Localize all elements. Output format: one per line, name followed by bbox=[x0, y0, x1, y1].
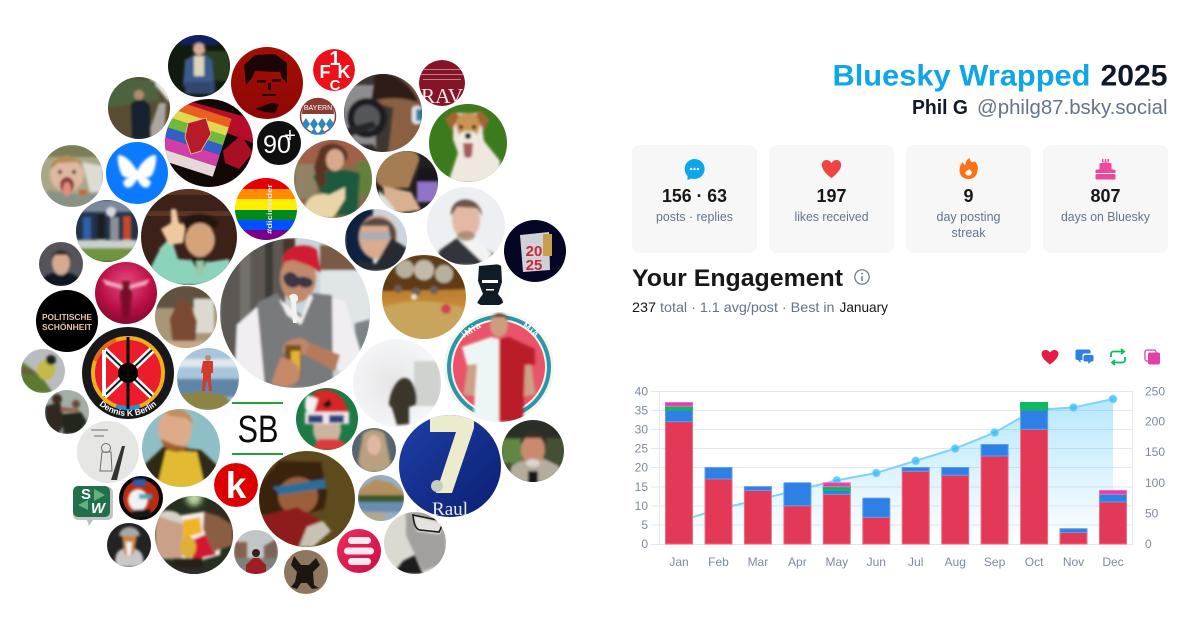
avatar cloud bbox=[21, 35, 566, 594]
avatar: Politische Schoenheit bbox=[36, 290, 98, 352]
avatar: 1 FCK crest: 1 bbox=[329, 48, 341, 70]
icon: heart bbox=[822, 160, 841, 178]
panel: likes received: 197 bbox=[816, 186, 846, 206]
reposts series bbox=[666, 402, 1048, 490]
panel: days on Bluesky bbox=[1043, 145, 1168, 253]
left axis labels: 30 bbox=[635, 422, 648, 436]
avatar: beer 2025 badge: 20 bbox=[526, 243, 542, 260]
avatar: red portrait bbox=[231, 47, 303, 119]
avatar: SW logo: S bbox=[81, 486, 91, 503]
avatar: thumbs up man bbox=[141, 189, 237, 285]
left axis labels: 15 bbox=[635, 480, 648, 494]
avatar: Dennis K Berlin: Dennis K Berlin bbox=[100, 400, 156, 416]
avatar: SB logo bbox=[232, 402, 284, 455]
month labels: May bbox=[825, 555, 848, 569]
month labels: Jul bbox=[908, 555, 923, 569]
chart legend bbox=[1042, 349, 1160, 365]
stacked bars bbox=[666, 402, 1126, 544]
likes series bbox=[666, 422, 1126, 544]
cumulative area and line bbox=[679, 395, 1117, 544]
icon: birthday cake bbox=[1096, 159, 1116, 180]
avatar: monster face bbox=[477, 264, 504, 305]
icon: legend heart bbox=[1042, 350, 1058, 364]
right axis labels bbox=[1145, 384, 1165, 551]
avatar: soccer players bbox=[45, 390, 89, 434]
avatar: warrior bbox=[259, 451, 355, 547]
avatar: red menu logo bbox=[337, 529, 381, 573]
left axis labels: 40 bbox=[635, 384, 648, 398]
avatar: hiker on mountain bbox=[177, 348, 239, 410]
month labels: Dec bbox=[1102, 555, 1124, 569]
avatar: woman with dog bbox=[294, 140, 372, 218]
icon: info bbox=[855, 270, 869, 284]
avatar: beer 2025 badge bbox=[504, 220, 566, 282]
icon: legend quote bbox=[1145, 350, 1160, 364]
avatar: dicinsider rainbow bbox=[235, 178, 297, 240]
avatar: street scene bbox=[234, 530, 278, 574]
avatar: rainbow armband bbox=[142, 96, 253, 187]
avatar: SW logo: W bbox=[91, 500, 107, 517]
panel: posting streak: day posting bbox=[936, 210, 1001, 224]
avatar: main profile photo bbox=[220, 238, 370, 388]
avatar: Politische Schoenheit: POLITISCHE bbox=[42, 312, 92, 322]
title: Bluesky Wrapped bbox=[832, 60, 1090, 92]
replies series bbox=[666, 410, 1126, 532]
avatar: boy at laptop bbox=[376, 149, 439, 213]
engagement chart bbox=[635, 384, 1165, 569]
avatar: guitar bbox=[382, 255, 466, 339]
avatar: 1 FCK crest bbox=[313, 48, 355, 94]
left axis labels: 20 bbox=[635, 460, 648, 474]
panel: posts and replies bbox=[632, 145, 757, 253]
panel: posting streak: streak bbox=[952, 226, 986, 240]
month labels: Aug bbox=[945, 555, 966, 569]
left axis labels bbox=[635, 384, 648, 551]
month labels: Jan bbox=[669, 555, 689, 569]
avatar: man in suit bbox=[427, 187, 505, 265]
month labels: Sep bbox=[984, 555, 1006, 569]
avatar: footballer in shirt: Mia bbox=[521, 320, 541, 339]
avatar: pencil drawing bbox=[77, 421, 139, 483]
avatar: football action bbox=[76, 200, 138, 262]
avatar: man in blazer bbox=[168, 35, 230, 97]
avatar: Bluesky butterfly bbox=[106, 142, 168, 204]
avatar: beer 2025 badge: 25 bbox=[526, 257, 542, 274]
avatar: footballer in shirt: iMia bbox=[460, 320, 483, 340]
left axis labels: 25 bbox=[635, 442, 648, 456]
user name and handle: @philg87.bsky.social bbox=[977, 97, 1168, 119]
avatar: person on boardwalk bbox=[108, 77, 170, 139]
engagement summary: total · 1.1 avg/post · Best in bbox=[660, 299, 834, 315]
chart grid bbox=[651, 391, 1133, 544]
avatar: man in black shirt bbox=[39, 242, 83, 286]
avatar: man with glasses bbox=[345, 209, 407, 271]
engagement summary: January bbox=[840, 299, 888, 315]
right axis labels: 50 bbox=[1145, 506, 1159, 520]
panel: posts and replies: 156 · 63 bbox=[662, 186, 727, 206]
right axis labels: 250 bbox=[1145, 384, 1165, 398]
avatar: 1 FCK crest: K bbox=[338, 62, 350, 82]
avatar: k logo: k bbox=[226, 465, 247, 506]
avatar: 90 plus logo: 90 bbox=[263, 131, 291, 159]
engagement summary bbox=[632, 299, 888, 315]
avatar: bird bbox=[21, 349, 65, 393]
avatar: grey portrait with glasses bbox=[384, 512, 446, 574]
panel: days on Bluesky: 807 bbox=[1090, 186, 1120, 206]
icon: speech bubble bbox=[685, 159, 705, 180]
right axis labels: 100 bbox=[1145, 476, 1165, 490]
avatar: figure in fog bbox=[353, 339, 441, 427]
engagement summary: 237 bbox=[632, 299, 656, 315]
avatar: santa with glasses bbox=[296, 388, 358, 450]
avatar: laughing baby bbox=[41, 145, 103, 207]
panel: likes received bbox=[769, 145, 894, 253]
avatar: jersey number 7 bbox=[399, 414, 501, 520]
avatar: smiling older man bbox=[502, 420, 564, 483]
avatar: k logo bbox=[214, 463, 258, 507]
right axis labels: 200 bbox=[1145, 414, 1165, 428]
avatar: SW logo bbox=[73, 486, 113, 526]
avatar: Politische Schoenheit: SCHÖNHEIT bbox=[42, 322, 93, 332]
avatar: badger silhouette bbox=[284, 550, 328, 594]
avatar: SB logo: SB bbox=[238, 409, 278, 451]
avatar: jersey number 7: Raul bbox=[432, 499, 468, 520]
right axis labels: 150 bbox=[1145, 445, 1165, 459]
avatar: 90 plus logo: + bbox=[284, 125, 296, 147]
month labels: Feb bbox=[708, 555, 729, 569]
avatar: lake landscape bbox=[358, 475, 404, 521]
right axis labels: 0 bbox=[1145, 537, 1152, 551]
quotes series bbox=[666, 402, 1126, 494]
left axis labels: 5 bbox=[641, 518, 648, 532]
month labels: Apr bbox=[788, 555, 807, 569]
month labels: Jun bbox=[867, 555, 886, 569]
avatar: Dennis K Berlin bbox=[82, 327, 174, 419]
month labels: Nov bbox=[1063, 555, 1084, 569]
month labels bbox=[669, 555, 1124, 569]
icon: flame bbox=[960, 158, 978, 179]
avatar: magenta concert bbox=[95, 262, 157, 324]
avatar: RAV logo bbox=[419, 60, 465, 108]
panel: days on Bluesky: days on Bluesky bbox=[1061, 210, 1151, 224]
avatar: BVB illustrated man bbox=[142, 409, 220, 487]
avatar: terrier dog bbox=[429, 104, 507, 183]
avatar: Bayern crest: BAYERN bbox=[304, 105, 332, 112]
avatar: woman at microphone bbox=[343, 73, 422, 153]
left axis labels: 35 bbox=[635, 404, 648, 418]
avatar: blonde woman bbox=[352, 428, 396, 472]
panel: likes received: likes received bbox=[794, 210, 869, 224]
left axis labels: 0 bbox=[641, 537, 648, 551]
icon: legend repost bbox=[1111, 349, 1125, 365]
icon: legend replies bbox=[1076, 350, 1094, 364]
user name and handle: Phil G bbox=[912, 97, 968, 119]
avatar: Bayern crest bbox=[300, 98, 336, 135]
avatar: footballer in shirt bbox=[444, 312, 554, 422]
avatar: man in brown robe bbox=[155, 286, 217, 349]
heading: your engagement: Your Engagement bbox=[632, 265, 843, 292]
panel: posts and replies: posts · replies bbox=[656, 210, 733, 224]
avatar: two men with trophy bbox=[155, 490, 233, 574]
avatar: dicinsider rainbow: #dicinsider bbox=[267, 184, 274, 234]
title: 2025 bbox=[1100, 60, 1168, 92]
panel: posting streak bbox=[906, 145, 1031, 253]
avatar: 90 plus logo bbox=[257, 121, 301, 165]
panel: posting streak: 9 bbox=[964, 186, 974, 206]
avatar: 1 FCK crest: C bbox=[330, 77, 341, 94]
month labels: Oct bbox=[1025, 555, 1044, 569]
avatar: dog with helmet bbox=[107, 523, 151, 567]
avatar: scrooge cartoon bbox=[119, 476, 163, 520]
month labels: Mar bbox=[748, 555, 768, 569]
avatar: RAV logo: RAV bbox=[421, 84, 463, 108]
avatar: 1 FCK crest: F bbox=[320, 62, 330, 82]
left axis labels: 10 bbox=[635, 499, 648, 513]
